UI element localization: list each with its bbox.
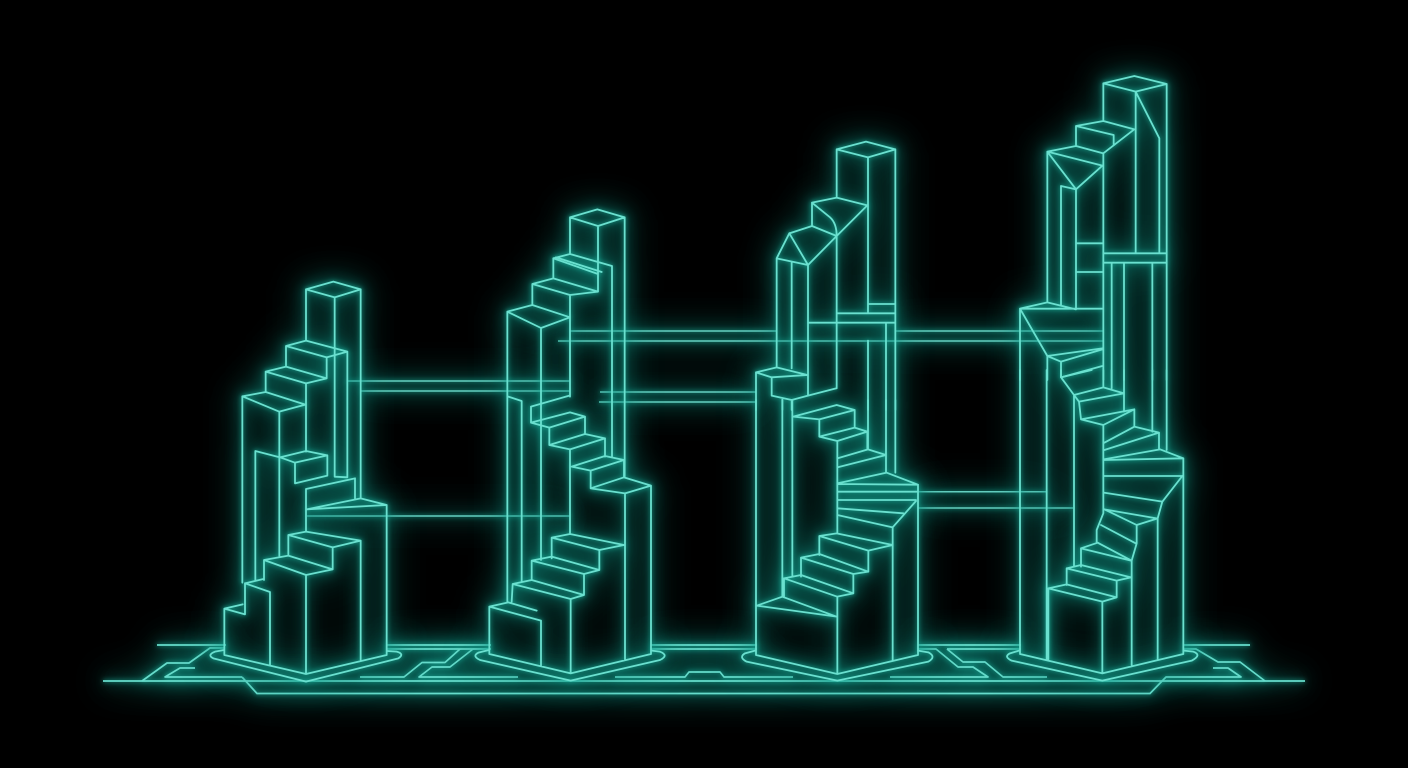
tower 2: [475, 209, 665, 681]
tower 3 base plate: [742, 651, 932, 681]
tower 3 upper section: [756, 142, 895, 410]
tower 4: [1007, 76, 1197, 681]
tower 1: [210, 282, 401, 682]
tower 2 wireframe stairs: [489, 209, 651, 673]
tower 3 lower section: [742, 400, 932, 681]
tower 4 upper section: [1020, 76, 1167, 380]
tower 2 base plate: [475, 650, 665, 681]
tower 4 base plate: [1007, 651, 1197, 681]
tower 1 wireframe stairs: [224, 282, 387, 674]
horizontal connector beams between towers: [307, 331, 1103, 516]
tower 3: [742, 142, 932, 681]
tower 1 base plate: [210, 650, 401, 682]
tower 4 lower section: [1007, 370, 1197, 681]
ground circuit lines: [103, 645, 1305, 694]
